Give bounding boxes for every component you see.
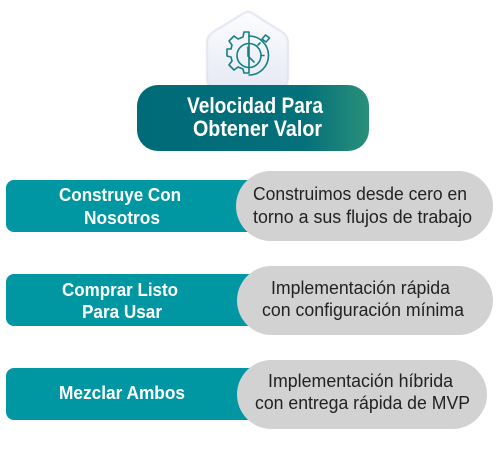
icon: gear half and stopwatch [227,32,270,75]
grey description pill: Construimos desde cero en [253,184,467,204]
grey description pill: Implementación rápida [271,278,451,298]
teal label bar: Mezclar Ambos [59,382,185,403]
hexagon badge [207,12,288,88]
title pill [137,85,369,151]
grey description pill [237,360,487,429]
grey description pill: con configuración mínima [262,300,465,320]
grey description pill: Implementación híbrida [268,371,454,391]
row 2: Comprar Listo Para Usar [6,266,493,335]
teal label bar [6,180,256,232]
grey description pill [236,171,493,241]
grey description pill: con entrega rápida de MVP [255,393,470,413]
teal label bar [6,368,256,420]
teal label bar: Para Usar [82,301,162,322]
title: Velocidad Para [187,93,324,118]
teal label bar: Nosotros [84,207,160,228]
teal label bar: Comprar Listo [62,279,178,300]
row 3: Mezclar Ambos [6,360,487,429]
teal label bar: Construye Con [59,184,181,205]
title pill: Obtener Valor [193,116,322,141]
row 1: Construye Con Nosotros [6,171,493,241]
icon: gear and stopwatch badge [207,12,288,88]
grey description pill [237,266,493,335]
teal label bar [6,274,256,326]
grey description pill: torno a sus flujos de trabajo [253,207,472,227]
